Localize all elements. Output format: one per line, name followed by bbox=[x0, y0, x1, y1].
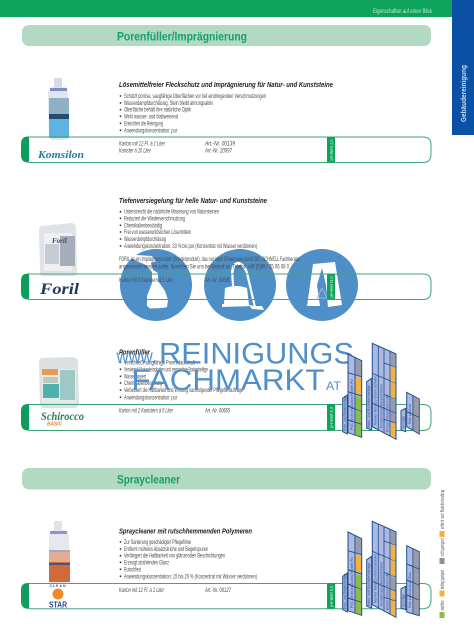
text block: Porenfüller Schirocco description: Chemikalienbeständig bbox=[124, 380, 162, 387]
icon: warning sign bbox=[307, 262, 342, 307]
product bar: Komsilon: pH-Wert 4,5 bbox=[329, 139, 335, 160]
text block: Komsilon description: Anwendungskonzentration: pur bbox=[124, 127, 177, 134]
product bar: Spraycleaner: STAR bbox=[49, 600, 67, 610]
table: right group: Sonstige bbox=[401, 594, 405, 607]
product bar: Foril: Foril bbox=[39, 281, 80, 298]
product bar: Komsilon: Art.-Nr. 00139 bbox=[204, 142, 236, 148]
legend: suitability key: entfernt nach Bodenbehandlung bbox=[440, 490, 446, 529]
product: Foril canister bbox=[39, 223, 77, 276]
product bar: Schirocco: Karton mit 2 Kanistern á 5 Liter bbox=[119, 409, 174, 415]
text block: Komsilon description bbox=[119, 80, 333, 134]
table: middle group: Klinker Fliesen Solnhofer bbox=[386, 571, 390, 610]
product bar: Spraycleaner: CLEAN bbox=[49, 584, 67, 588]
table: middle group: Marmor Terrazzo Granit Schiefer bbox=[374, 375, 378, 425]
product bar: Spraycleaner bbox=[21, 583, 431, 610]
side tab: Gebäudereinigung: Gebäudereinigung bbox=[459, 65, 468, 122]
product bar: Foril: Karton mit 2 Kanistern á 5 Liter bbox=[119, 278, 174, 284]
product bar: Komsilon: Art.-Nr. 20597 bbox=[204, 148, 232, 154]
text block: Spraycleaner description: Erzeugt strahlenden Glanz bbox=[124, 559, 169, 566]
table: left group: Holz- und Bodenbeläge bbox=[343, 395, 347, 431]
product: Schirocco canister bbox=[39, 357, 79, 408]
side tab: Gebäudereinigung bbox=[452, 0, 474, 135]
top green header band bbox=[0, 0, 452, 17]
blue circle icons bbox=[120, 249, 358, 321]
text block: Foril description: Chemikalienbeständig bbox=[124, 222, 162, 229]
text block: Foril description bbox=[119, 196, 300, 271]
product: Clean Star bottle bbox=[49, 521, 70, 583]
product bar: Spraycleaner: Karton mit 12 Fl. á 1 Liter bbox=[119, 588, 165, 594]
product bar: Spraycleaner: pH-Wert 5,5 bbox=[329, 585, 335, 607]
heading: Spraycleaner: Spraycleaner bbox=[117, 472, 180, 486]
icon: vacuum cleaner bbox=[222, 262, 264, 310]
text block: Porenfüller Schirocco description: Anwendungskonzentration: pur bbox=[124, 394, 177, 401]
text block: Foril description: Anwendungskonzentration: 33 % bis pur (Konzentrat mit Wasser verdünnen) bbox=[124, 243, 257, 250]
table: left group bbox=[343, 354, 362, 437]
table: middle group: Marmor Terrazzo Granit Schiefer bbox=[374, 553, 378, 603]
legend: suitability key: bedingt geeignet bbox=[440, 570, 446, 589]
top green header band: Eigenschaften auf einen Blick bbox=[373, 8, 433, 15]
chart: suitability table Porenfüller bbox=[343, 343, 419, 439]
text block: Spraycleaner description: Zur Sanierung geschädigter Pflegefilme bbox=[124, 539, 191, 546]
text block: Porenfüller Schirocco description: Wasserbasiert bbox=[124, 373, 146, 380]
table: right group bbox=[401, 392, 419, 434]
table: middle group: Feinsteinzeug Keramik Beton bbox=[380, 384, 384, 428]
watermark: www.reinigungsfachmarkt.at: www. bbox=[116, 347, 156, 368]
product bar: Schirocco: Art.-Nr. 00665 bbox=[204, 409, 230, 415]
table: right group: Sonstige bbox=[401, 416, 405, 429]
product bar: Komsilon: Komsilon bbox=[37, 149, 84, 161]
table: middle group: Natur- und Kunststeinbeläge bbox=[367, 385, 371, 428]
text block: Foril description: FORIL ist ein Imprägnierprodukt (Sonderprodukt), das nur nach Einweisung durch DR. SCHNELL Fachberater bbox=[119, 256, 300, 263]
table: middle group: Feinsteinzeug Keramik Beton bbox=[380, 562, 384, 606]
product bar: Schirocco: pH-Wert 6,3 bbox=[329, 407, 335, 428]
table: right group: Holz Laminat Kork Glas bbox=[408, 572, 412, 608]
table: left group bbox=[343, 532, 362, 615]
table: middle group bbox=[367, 343, 396, 439]
text block: Porenfüller Schirocco description bbox=[119, 348, 243, 401]
table: left group: PVC Linoleum Gummi Parkett PU bbox=[350, 379, 354, 430]
text block: Spraycleaner description: Spraycleaner mit rutschhemmenden Polymeren bbox=[119, 526, 252, 536]
product bar: Foril bbox=[21, 274, 431, 300]
legend: suitability key bbox=[440, 490, 446, 618]
table: middle group: Natur- und Kunststeinbeläge bbox=[367, 563, 371, 606]
text block: Foril description: angewendet werden sollte. Sprechen Sie uns bei Bedarf an: Telefon +49 (0)89 / 35 06 08 0 bbox=[119, 264, 289, 271]
text block: Porenfüller Schirocco description: Versiegelt Natursteinplatten und zementäre Bodenbeläge bbox=[124, 366, 208, 373]
legend: suitability key: empfohlen bbox=[440, 600, 446, 610]
text block: Spraycleaner description: Anwendungskonzentration: 15 bis 20 % (Konzentrat mit Wasser verdünnen) bbox=[124, 573, 257, 580]
heading: Porenfüller/Imprägnierung: Porenfüller/Imprägnierung bbox=[117, 30, 247, 44]
product bar: Foril: pH-Wert 11,0 bbox=[329, 276, 335, 298]
table: left group: Holz- und Bodenbeläge bbox=[343, 573, 347, 609]
product bar: Foril: Art.-Nr. 00635 bbox=[204, 278, 230, 284]
product bar: Schirocco: Schirocco bbox=[41, 411, 84, 423]
product bar: Komsilon: Karton mit 12 Fl. á 1 Liter bbox=[119, 142, 166, 148]
watermark: www.reinigungsfachmarkt.at: FACHMARKT bbox=[132, 364, 324, 397]
heading: Spraycleaner bbox=[22, 468, 431, 490]
text block: Porenfüller Schirocco description: Porenfüller bbox=[119, 348, 151, 356]
text block: Komsilon description: Schützt poröse, saugfähige Oberflächen vor tief eindringenden Verschmutzungen bbox=[124, 93, 266, 100]
watermark: www.reinigungsfachmarkt.at: AT bbox=[326, 379, 342, 393]
text block: Komsilon description: Lösemittelfreier Fleckschutz und Imprägnierung für Natur- und Kunststeine bbox=[119, 80, 333, 89]
table: right group: Holz Laminat bbox=[408, 404, 412, 424]
text block: Spraycleaner description: Entfernt mühelos Absatzstriche und Begehspuren bbox=[124, 546, 208, 553]
text block: Foril description: Reduziert die Wiederverschmutzung bbox=[124, 215, 185, 222]
product bar: Spraycleaner: Art.-Nr. 00127 bbox=[204, 588, 231, 594]
chart: suitability table Spraycleaner bbox=[343, 521, 419, 617]
text block: Komsilon description: Wirkt wasser- und ölabweisend bbox=[124, 113, 178, 120]
table: left group: PVC Linoleum Gummi Parkett PU bbox=[350, 557, 354, 608]
text block: Foril description: Wasserdampfdurchlässig bbox=[124, 236, 166, 243]
product: Komsilon bottle bbox=[48, 78, 69, 140]
legend: suitability key: nicht geeignet bbox=[440, 538, 446, 556]
table: middle group: Klinker Fliesen Solnhofer bbox=[386, 393, 390, 432]
text block: Porenfüller Schirocco description: Verbessert die Haftbarkeit und Wirkung nachfolgender Pflegefilmaufträge bbox=[124, 387, 243, 394]
watermark: www.reinigungsfachmarkt.at bbox=[116, 338, 354, 397]
text block: Komsilon description: Wasserdampfdurchlässig, Stein bleibt atmungsaktiv bbox=[124, 100, 214, 107]
text block: Spraycleaner description: Rutschfest bbox=[124, 566, 141, 573]
text block: Foril description: Unterstreicht die natürliche Maserung von Natursteinen bbox=[124, 209, 219, 216]
text block: Komsilon description: Erleichtert die Reinigung bbox=[124, 120, 163, 127]
heading: Porenfüller/Imprägnierung bbox=[22, 25, 431, 46]
text block: Spraycleaner description: Verlängert die Haltbarkeit von glänzenden Beschichtungen bbox=[124, 553, 225, 560]
watermark: www.reinigungsfachmarkt.at: REINIGUNGS bbox=[159, 338, 354, 370]
text block: Porenfüller Schirocco description: Verschließt saugfähige Poren dauerhaft bbox=[124, 359, 195, 366]
text block: Foril description: Tiefenversiegelung für helle Natur- und Kunststeine bbox=[119, 196, 267, 205]
text block: Komsilon description: Oberfläche behält ihre natürliche Optik bbox=[124, 107, 192, 114]
table: right group bbox=[401, 546, 419, 616]
text block: Spraycleaner description bbox=[119, 526, 257, 580]
table: middle group bbox=[367, 521, 396, 617]
text block: Foril description: Frei von wasserunlöslichen Lösemitteln bbox=[124, 229, 191, 236]
product bar: Komsilon bbox=[21, 136, 431, 162]
icon: spray bottle bbox=[131, 255, 168, 308]
product bar: Komsilon: Kanister á 10 Liter bbox=[119, 148, 152, 154]
product bar: Schirocco: BASIC bbox=[47, 422, 62, 428]
product bar: Schirocco bbox=[21, 404, 431, 430]
product: Foril canister: Foril bbox=[52, 237, 67, 245]
